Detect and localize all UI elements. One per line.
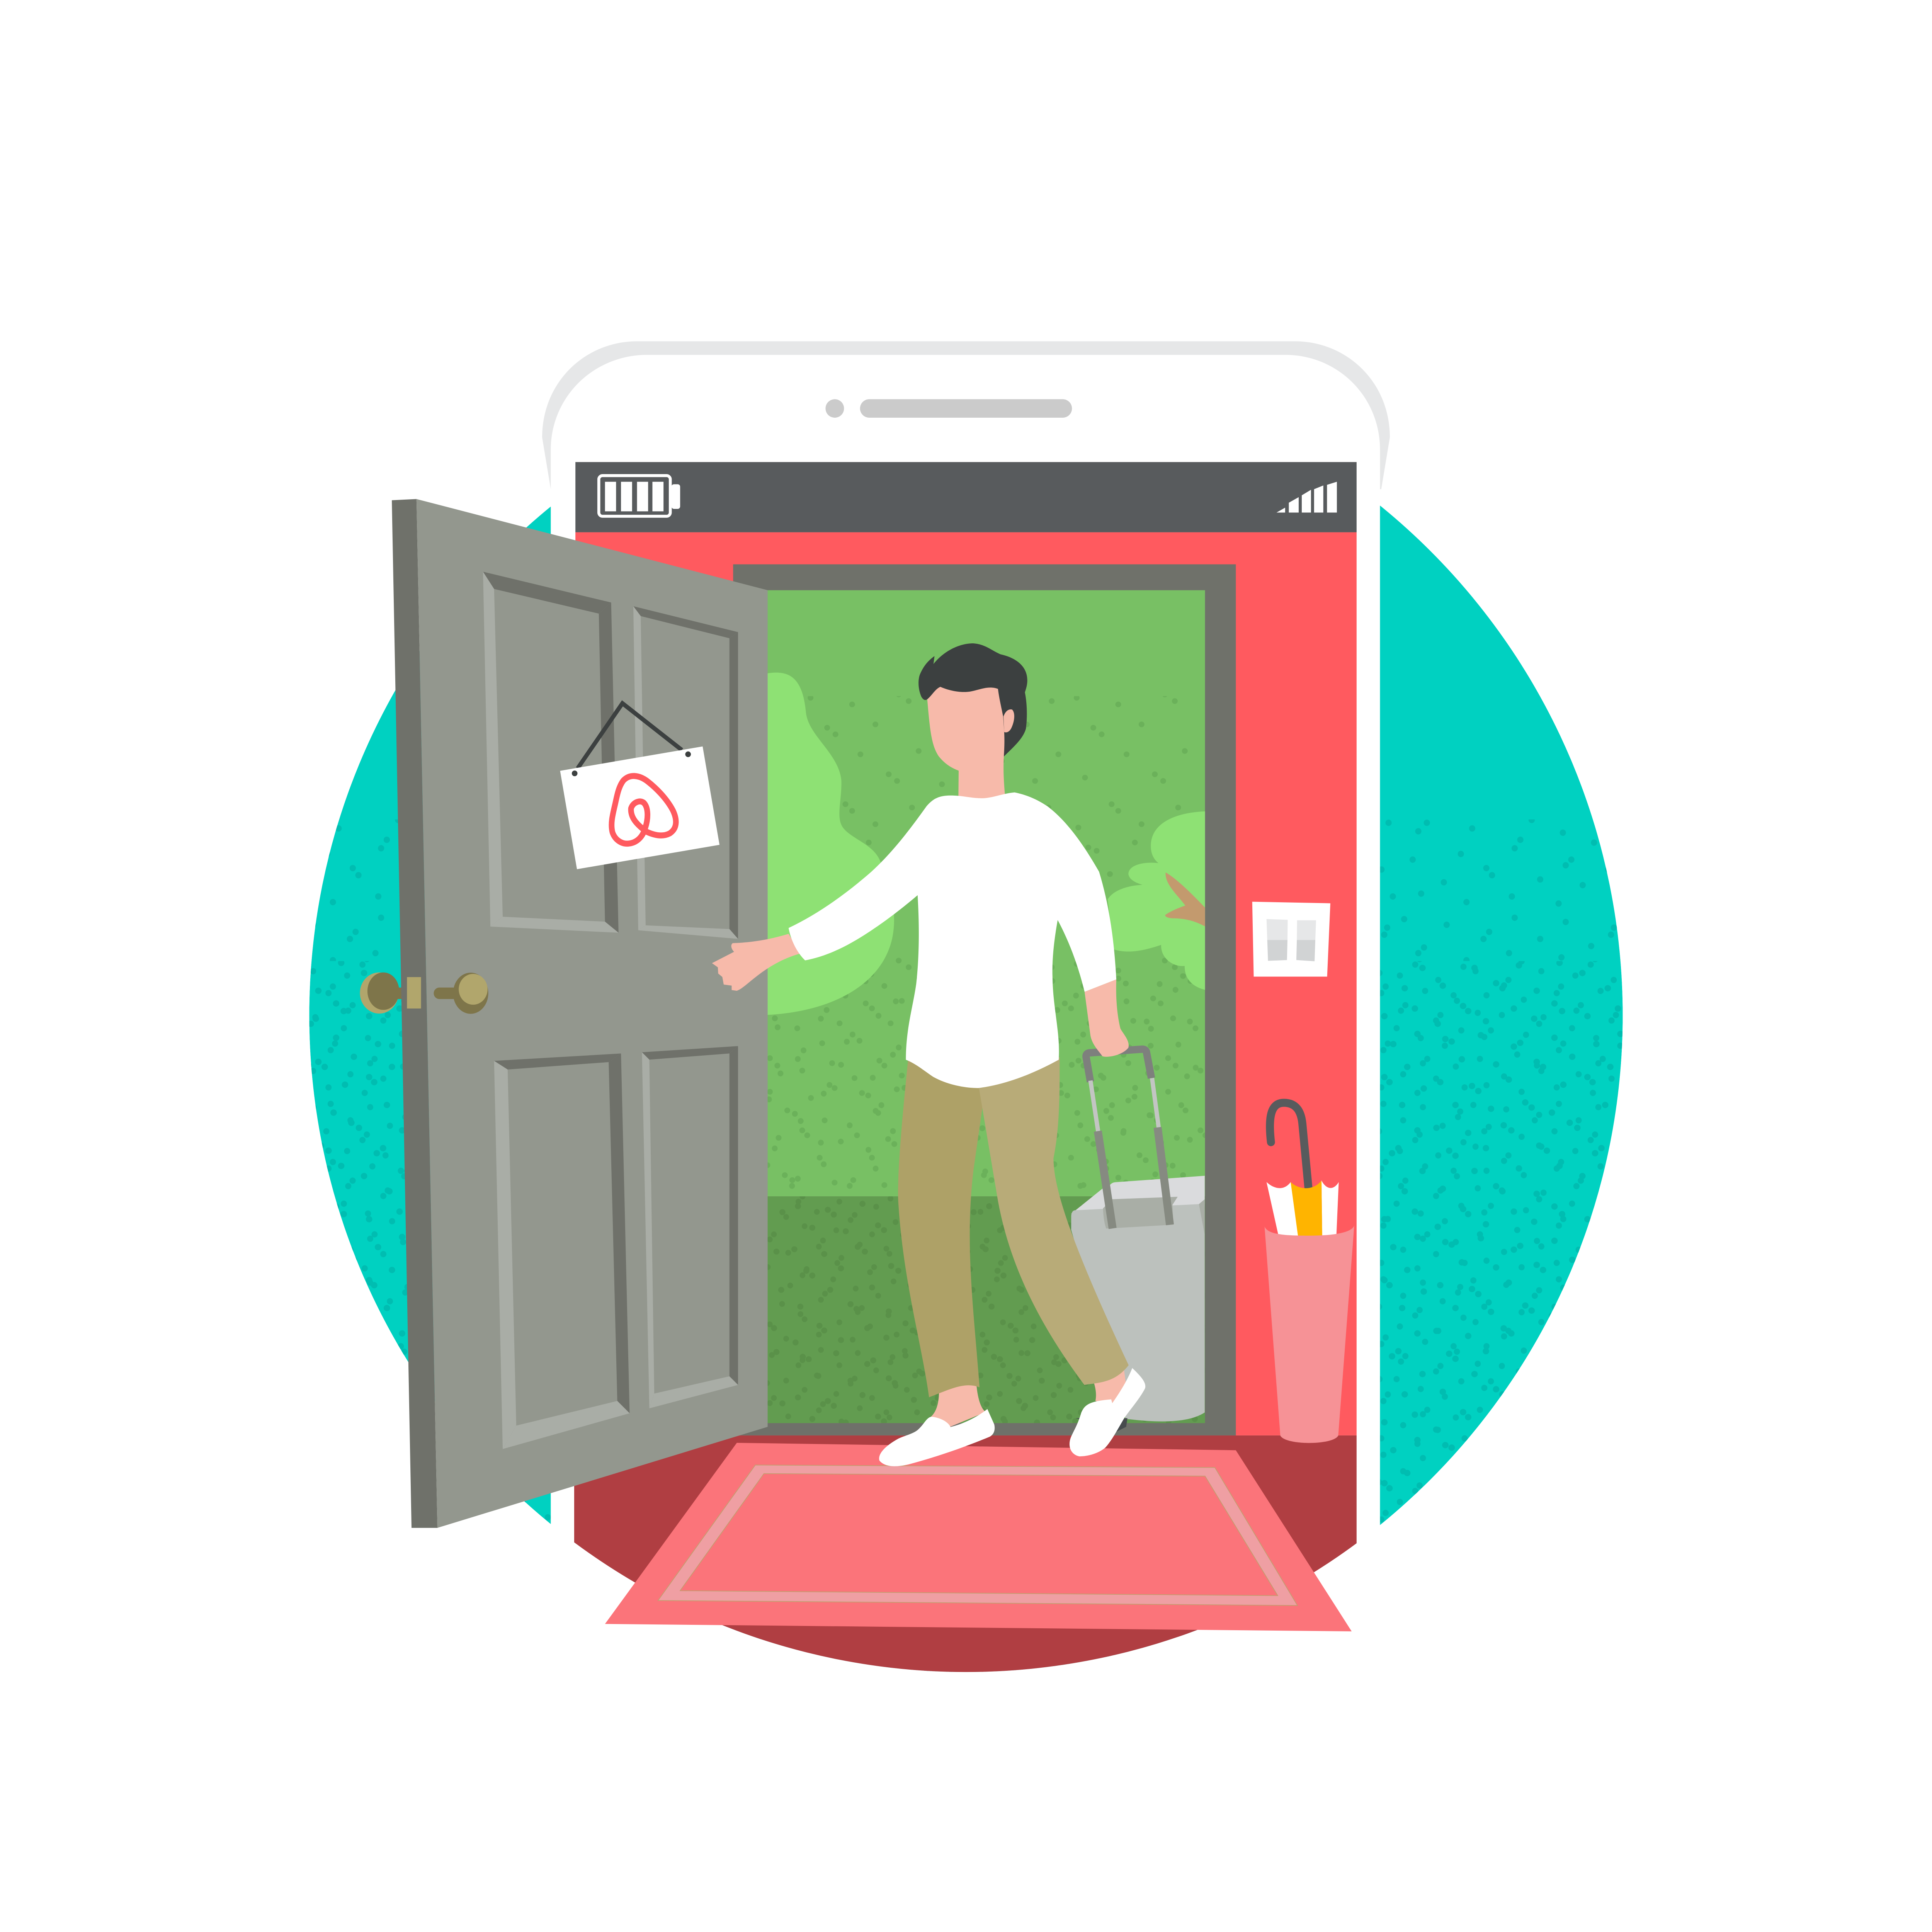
phone status bar xyxy=(575,462,1357,532)
white sweater xyxy=(789,793,1116,1088)
panel: lower right xyxy=(642,1046,738,1408)
umbrella handle xyxy=(1270,1103,1308,1189)
neck and face xyxy=(927,687,1006,806)
illustration: traveller stepping through a phone-screen doorway xyxy=(309,341,1623,1672)
floor xyxy=(574,1435,1357,1682)
door mat xyxy=(605,1443,1352,1631)
red wall xyxy=(575,532,1357,1435)
light switch xyxy=(1252,902,1330,976)
garden view through doorway xyxy=(739,590,1206,1423)
ear xyxy=(1003,709,1014,732)
icon: battery xyxy=(599,476,680,516)
mat border xyxy=(658,1465,1298,1605)
person walking through door xyxy=(712,643,1145,1466)
sign card xyxy=(560,747,719,869)
front camera dot xyxy=(825,399,844,418)
trousers: front leg xyxy=(978,1057,1129,1385)
suitcase side shade xyxy=(1199,1199,1205,1235)
trousers: back leg xyxy=(898,1060,986,1397)
suitcase body xyxy=(1071,1199,1205,1422)
tree trunk xyxy=(1165,872,1206,927)
left shrub xyxy=(767,672,894,1015)
panel: upper right xyxy=(633,606,738,939)
sign hanger cord xyxy=(578,703,682,769)
right shoe xyxy=(1070,1368,1145,1456)
umbrella yellow panel xyxy=(1291,1180,1322,1238)
hanging sign with logo xyxy=(560,703,719,869)
right tree foliage xyxy=(1108,811,1206,990)
phone body xyxy=(542,341,1390,1602)
door lock plate xyxy=(407,977,421,1009)
door outer knob xyxy=(360,973,404,1014)
door face xyxy=(417,499,768,1528)
umbrella in stand xyxy=(1265,1103,1354,1443)
reaching hand and forearm xyxy=(712,934,801,991)
suitcase xyxy=(1071,1176,1205,1422)
umbrella stand xyxy=(1265,1225,1354,1443)
panel: upper left xyxy=(483,572,619,933)
carrying forearm and hand xyxy=(1085,980,1129,1057)
open door xyxy=(360,499,768,1528)
icon: signal strength xyxy=(1277,482,1337,513)
left shoe xyxy=(879,1409,995,1466)
logo mark xyxy=(612,776,676,844)
teal background circle xyxy=(309,505,1623,1672)
suitcase lid xyxy=(1071,1176,1205,1217)
hair xyxy=(918,643,1027,758)
umbrella white panels xyxy=(1267,1180,1339,1238)
door frame xyxy=(733,564,1236,1435)
door edge xyxy=(392,499,437,1528)
door inner knob xyxy=(434,973,488,1014)
ankles xyxy=(929,1358,1126,1427)
panel: lower left xyxy=(494,1053,629,1449)
suitcase wheel xyxy=(1076,1418,1128,1432)
suitcase trolley handle xyxy=(1086,1049,1170,1228)
speaker slot xyxy=(860,399,1072,418)
suitcase handle recess xyxy=(1103,1197,1178,1229)
